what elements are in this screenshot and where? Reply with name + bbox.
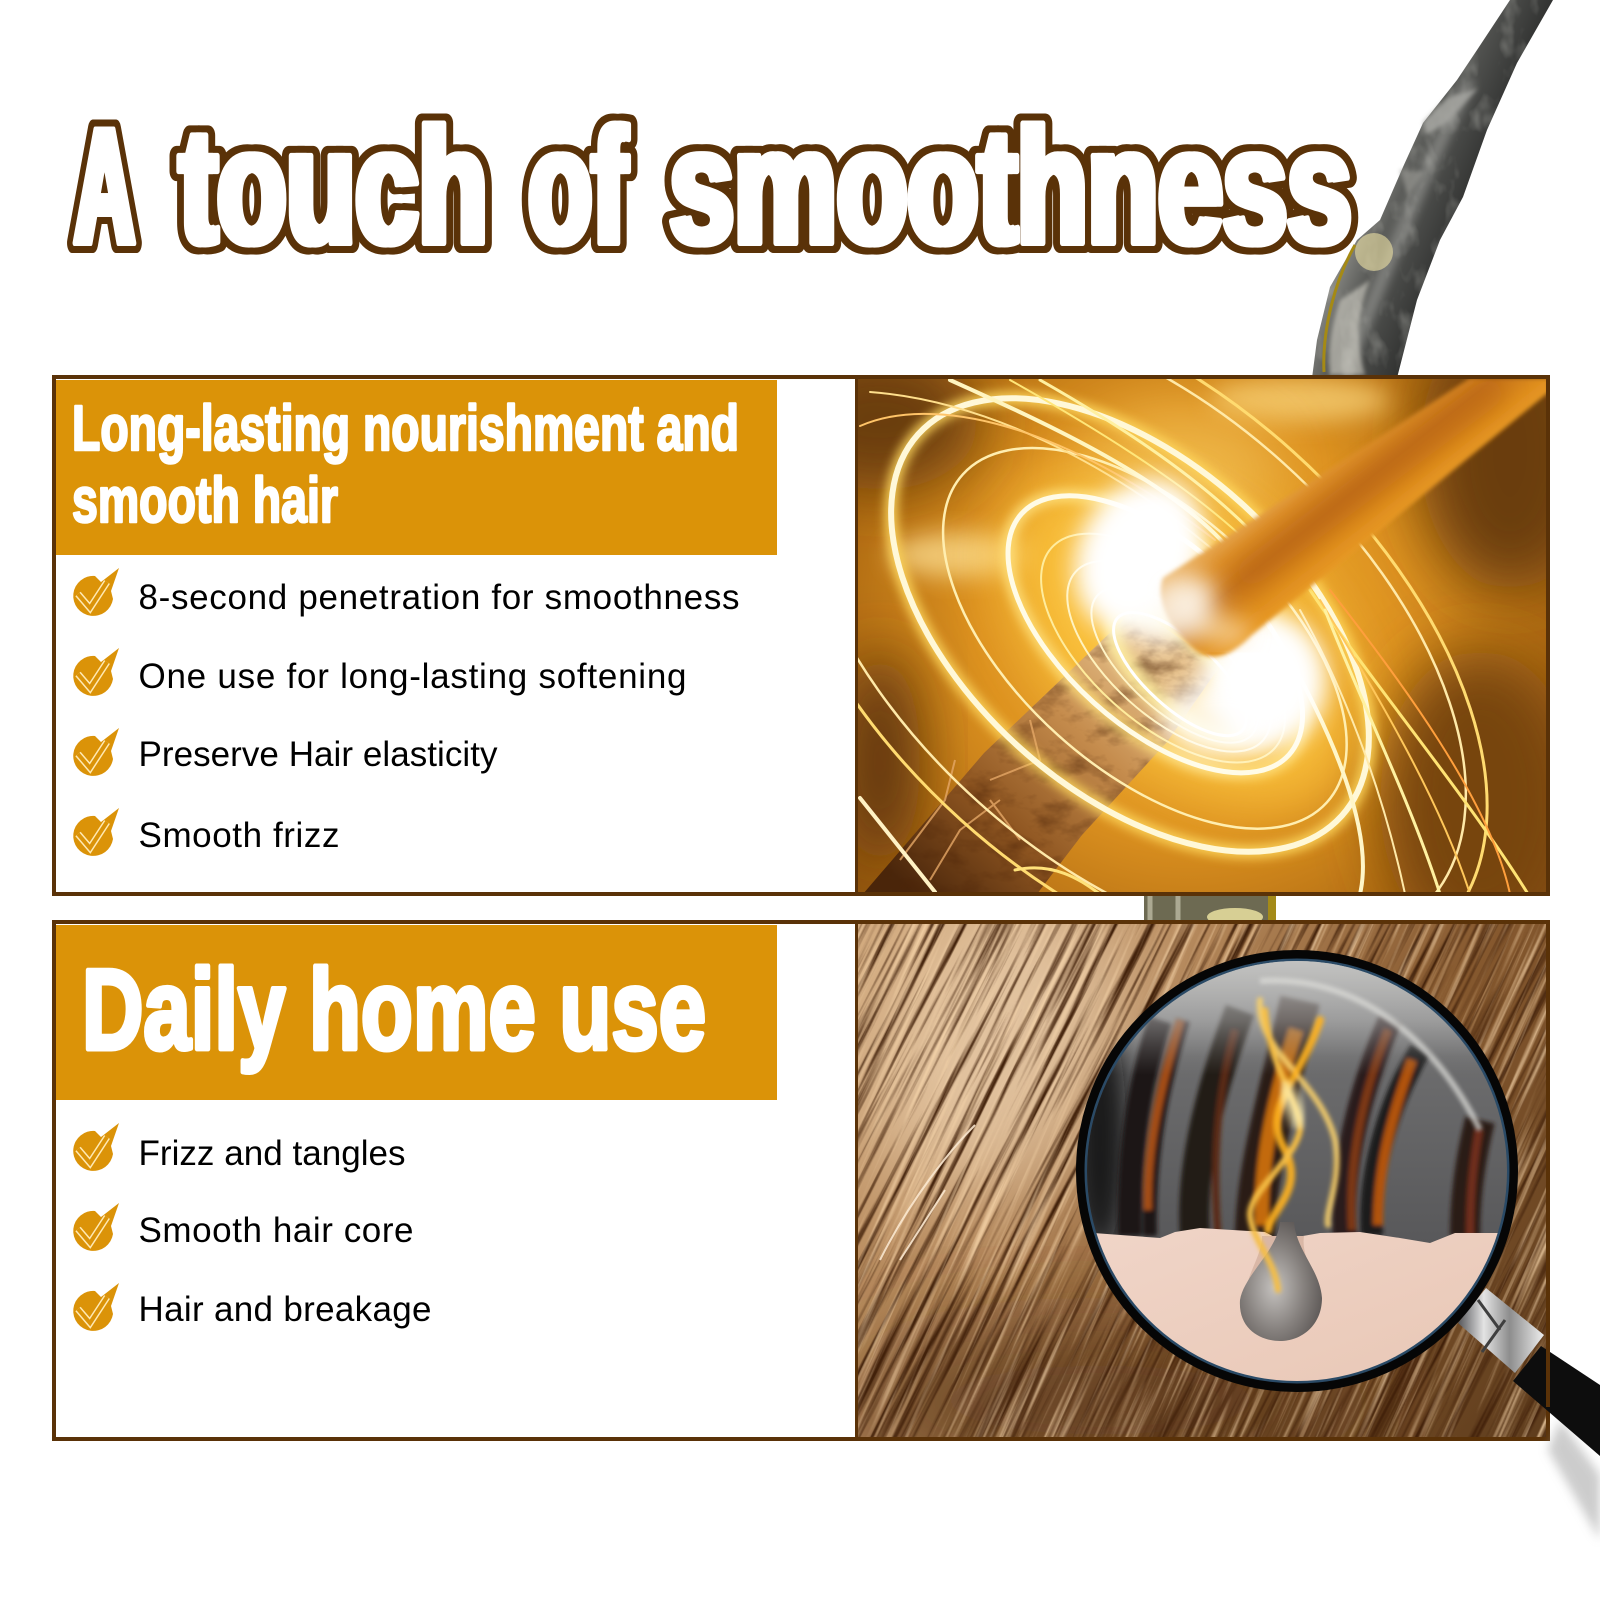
title: of bbox=[531, 94, 630, 278]
item: hair core: Smooth hair core bbox=[138, 1211, 414, 1250]
panel border bbox=[54, 922, 1548, 1439]
glow core bbox=[1050, 456, 1327, 748]
title: of bbox=[526, 94, 625, 278]
title: A bbox=[72, 94, 132, 278]
item: softening: One use for long-lasting softening bbox=[138, 657, 686, 696]
title: touch bbox=[182, 94, 490, 278]
lens rim bbox=[1083, 957, 1511, 1385]
image: glowing hair shaft with golden rings bbox=[858, 379, 1546, 892]
title: of bbox=[524, 94, 623, 278]
title bbox=[70, 94, 1356, 278]
item: frizz bbox=[73, 808, 340, 856]
hair follicle bbox=[1240, 1222, 1322, 1341]
item: penetration: 8-second penetration for smoothness bbox=[138, 578, 740, 617]
panel background bbox=[54, 922, 1548, 1439]
upper smooth hair shaft bbox=[1161, 378, 1549, 657]
lower cracked hair shaft bbox=[863, 608, 1220, 894]
item: hair core bbox=[73, 1203, 414, 1251]
title: A bbox=[79, 94, 139, 278]
golden swirls bbox=[1250, 1000, 1337, 1290]
item: elasticity: Preserve Hair elasticity bbox=[138, 735, 498, 774]
golden rings bbox=[858, 379, 1528, 892]
skin layer bbox=[1096, 1228, 1498, 1381]
item: breakage bbox=[73, 1283, 432, 1331]
item: frizz and tangles: Frizz and tangles bbox=[138, 1134, 406, 1173]
title: touch bbox=[184, 94, 492, 278]
title: A bbox=[70, 94, 130, 278]
heading: long-lasting nourishment: smooth hair bbox=[72, 464, 338, 536]
lens glass reflection bbox=[1260, 981, 1480, 1130]
item: elasticity bbox=[73, 728, 498, 776]
panel heading band bbox=[56, 380, 777, 555]
top haze over strands bbox=[1116, 961, 1471, 1068]
title: A bbox=[77, 94, 137, 278]
image divider bbox=[855, 922, 858, 1439]
image: hair strand behind panels bbox=[1144, 0, 1553, 926]
heading: long-lasting nourishment: Long-lasting nourishment and bbox=[72, 392, 739, 464]
title: touch bbox=[175, 94, 483, 278]
item: frizz and tangles bbox=[73, 1123, 406, 1173]
panel: long-lasting nourishment bbox=[52, 375, 1550, 896]
item: frizz: Smooth frizz bbox=[138, 816, 340, 855]
benefits list bbox=[73, 1123, 432, 1331]
heading: long-lasting nourishment bbox=[72, 392, 739, 536]
lens contents bbox=[1087, 961, 1507, 1381]
title: touch bbox=[177, 94, 485, 278]
panel background bbox=[54, 377, 1548, 894]
panel border bbox=[54, 377, 1548, 894]
magnifying glass bbox=[1074, 955, 1600, 1540]
hair strands in lens bbox=[1130, 1000, 1480, 1240]
panel heading band bbox=[56, 925, 777, 1100]
image divider bbox=[855, 377, 858, 894]
item: breakage: Hair and breakage bbox=[138, 1290, 432, 1329]
heading: daily home use: Daily home use bbox=[82, 947, 706, 1074]
handle bbox=[1458, 1288, 1600, 1540]
benefits list bbox=[73, 568, 740, 856]
panel: daily home use bbox=[52, 920, 1600, 1537]
image: hair under magnifying glass bbox=[858, 924, 1546, 1437]
title: of bbox=[533, 94, 632, 278]
